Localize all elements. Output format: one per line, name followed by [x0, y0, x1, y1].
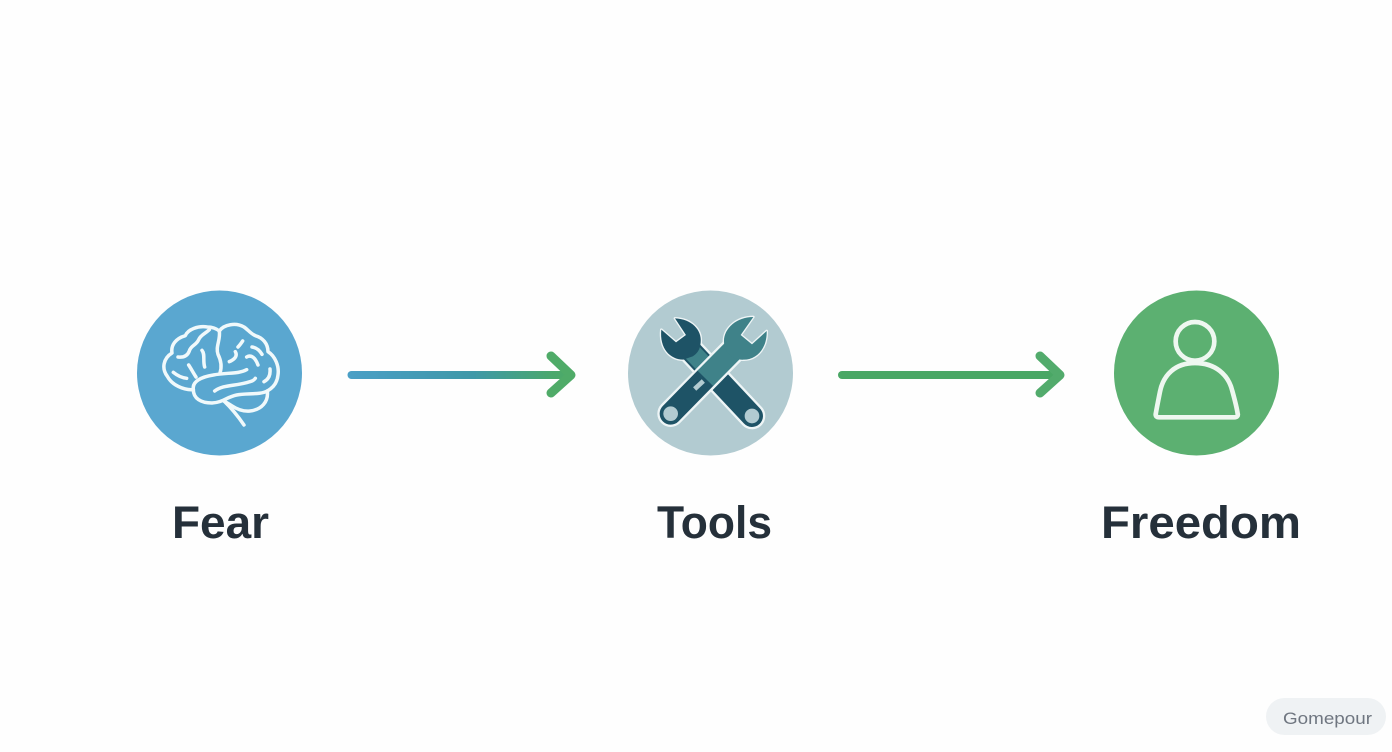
step: tools — [628, 290, 793, 548]
label: Fear: Fear — [172, 497, 269, 548]
wrench: back, dark, head upper left — [661, 318, 759, 423]
badge: Gomepour — [1266, 698, 1386, 735]
step: fear — [137, 290, 302, 548]
icon: crossed wrenches in grey-blue circle — [628, 290, 793, 456]
badge: Gomepour: Gomepour — [1283, 709, 1372, 728]
step: freedom — [1101, 290, 1301, 548]
icon: person in green circle — [1114, 290, 1279, 456]
label: Tools: Tools — [657, 497, 772, 548]
wrench: front, teal head, dark handle, upper right — [663, 317, 767, 421]
label: Freedom: Freedom — [1101, 497, 1301, 548]
icon: brain in blue circle — [137, 290, 302, 456]
arrow: tools to freedom — [842, 356, 1060, 393]
arrow: fear to tools — [352, 356, 571, 393]
